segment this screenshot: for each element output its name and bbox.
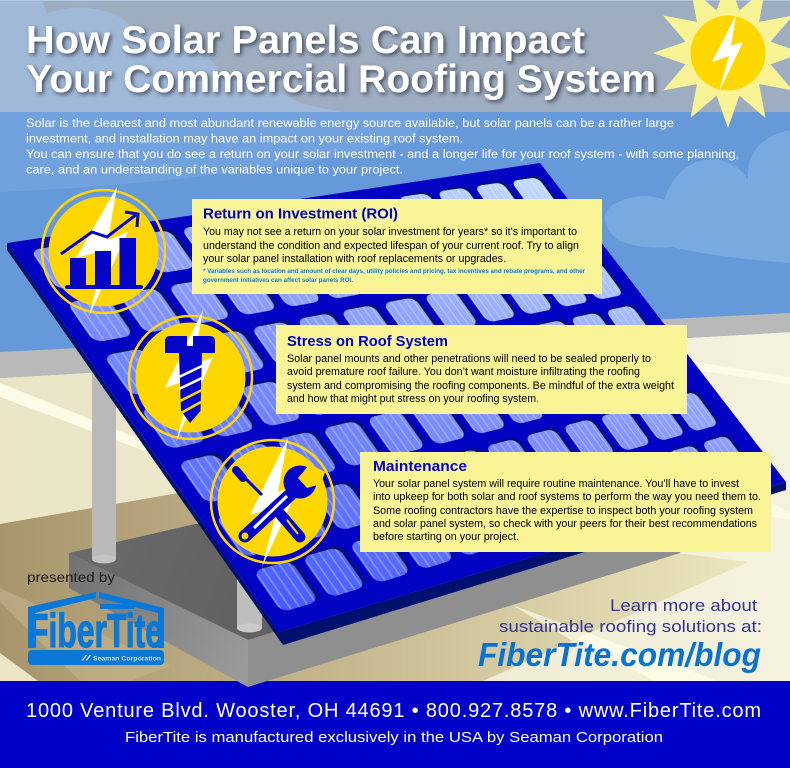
intro paragraph [26, 116, 739, 176]
front post [237, 570, 262, 632]
text: ROI body: You may not see a return on your solar investment for years* so it’s important to [203, 226, 577, 238]
logo: FiberTite: // [80, 656, 92, 662]
title band [0, 0, 790, 112]
text: ROI footnote: government initiatives can affect solar panels ROI. [203, 277, 353, 284]
text: maintenance body: into upkeep for both solar and roof systems to perform the way you need them to. [373, 491, 761, 503]
icon: sun [653, 0, 790, 128]
call to action: sustainable roofing solutions at: [499, 617, 762, 636]
text: ROI body [203, 226, 579, 265]
concrete slab [69, 500, 700, 687]
title: How Solar Panels Can Impact [26, 19, 585, 62]
icon: screw badge [129, 310, 252, 442]
text: maintenance body: and solar panel system, so check with your peers for their best recommendations [373, 518, 758, 530]
heading: maintenance: Maintenance [373, 458, 467, 475]
text: maintenance body: before starting on your project. [373, 531, 519, 543]
text: stress body: Solar panel mounts and other penetrations will need to be sealed properly to [287, 353, 651, 365]
text: maintenance body: Your solar panel system will require routine maintenance. You’ll have to invest [373, 478, 739, 490]
roof deck [0, 332, 790, 685]
rear post [92, 360, 116, 564]
heading: stress: Stress on Roof System [287, 333, 448, 350]
intro paragraph: Solar is the cleanest and most abundant renewable energy source available, but solar panels can be a rather large [26, 116, 674, 130]
logo: FiberTite [28, 592, 164, 665]
title: Your Commercial Roofing System [26, 58, 656, 101]
text: ROI body: understand the condition and expected lifespan of your current roof. Try to align [203, 240, 579, 252]
right cloud [605, 130, 790, 263]
tan floor shadow [0, 491, 748, 681]
logo: FiberTite: FiberTite [29, 604, 163, 657]
icon: wrench and screwdriver badge [211, 438, 334, 567]
logo: FiberTite: Seaman Corporation [93, 656, 161, 662]
footer text: FiberTite is manufactured exclusively in the USA by Seaman Corporation [125, 729, 663, 746]
intro paragraph: care, and an understanding of the variables unique to your project. [26, 162, 403, 176]
text: stress body: system and compromising the roofing components. Be mindful of the extra weight [287, 380, 674, 392]
text: ROI footnote [203, 268, 585, 284]
icon: bar chart badge [42, 187, 165, 316]
title [26, 19, 656, 101]
text: stress body: and how that might put stress on your roofing system. [287, 393, 539, 405]
call to action: Learn more about [610, 596, 757, 615]
text: maintenance body: Some roofing contractors have the expertise to inspect both your roofing system [373, 505, 753, 517]
panel: maintenance [360, 452, 771, 552]
text: ROI footnote: * Variables such as location and amount of clear days, utility policies and pricing, tax incentives and rebate programs, and other [203, 268, 585, 275]
footer band [0, 681, 790, 768]
panel: stress on roof system [276, 325, 687, 414]
text: presented by: presented by [27, 569, 115, 585]
text: maintenance body [373, 478, 761, 543]
text: ROI body: your solar panel installation with roof replacements or upgrades. [203, 253, 506, 265]
solar panel cells in perspective [33, 176, 742, 610]
intro paragraph: You can ensure that you do see a return on your solar investment - and a longer life for your roof system - with some planning, [26, 147, 739, 161]
text: stress body: avoid premature roof failure. You don’t want moisture infiltrating the roofing [287, 366, 640, 378]
heading: ROI: Return on Investment (ROI) [203, 206, 398, 222]
text: stress body [287, 353, 674, 405]
call to action [478, 596, 762, 673]
panel: return on investment [192, 199, 602, 294]
intro paragraph: investment, and installation may have an impact on your existing roof system. [26, 132, 463, 146]
footer text: 1000 Venture Blvd. Wooster, OH 44691 • 800.927.8578 • www.FiberTite.com [26, 700, 761, 722]
call to action: FiberTite.com/blog [478, 636, 761, 673]
footer text [26, 700, 761, 746]
roof parapet [0, 313, 790, 378]
